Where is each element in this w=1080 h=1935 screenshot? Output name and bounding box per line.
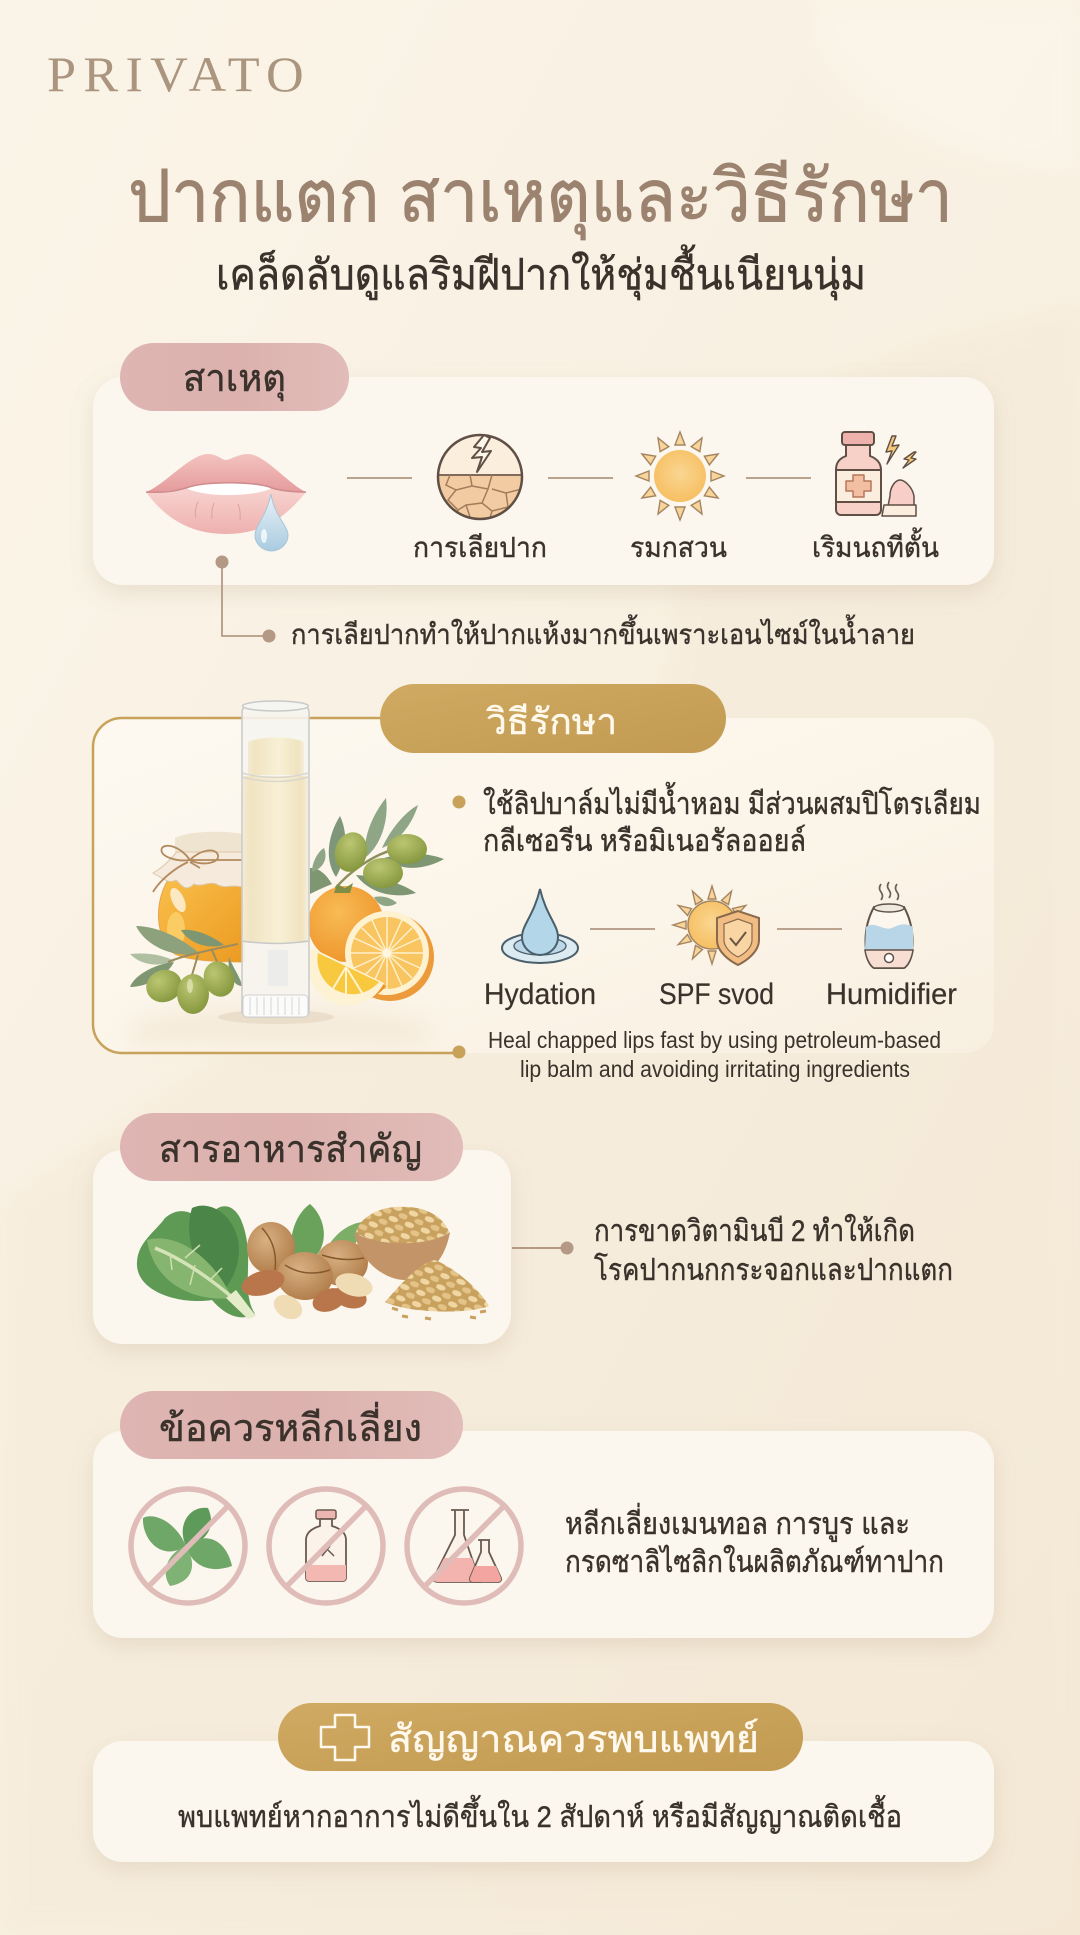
panel: treatment — [93, 684, 994, 1082]
heading pill: treatment — [380, 684, 726, 753]
text: English note: lip balm and avoiding irritating ingredients — [520, 1056, 910, 1082]
connector lines — [590, 928, 842, 930]
callout: vitamin B2 note: โรคปากนกกระจอกและปากแตก — [594, 1252, 953, 1287]
label: SPF: SPF svod — [659, 978, 774, 1011]
callout: lip licking note: การเลียปากทำให้ปากแห้งมากขึ้นเพราะเอนไซม์ในน้ำลาย — [291, 614, 915, 650]
icon: chapped lips with drop — [146, 454, 306, 551]
heading pill: avoid — [120, 1391, 463, 1459]
heading pill: causes: สาเหตุ — [183, 358, 286, 401]
illustration: honey jar — [153, 832, 244, 962]
text: ingredients to avoid: หลีกเลี่ยงเมนทอล การบูร และ — [565, 1503, 910, 1542]
subtitle: เคล็ดลับดูแลริมฝีปากให้ชุ่มชื้นเนียนนุ่ม — [216, 244, 866, 301]
heading pill: avoid: ข้อควรหลีกเลี่ยง — [159, 1402, 422, 1450]
text: English note — [488, 1027, 941, 1082]
bullet — [452, 796, 466, 808]
heading pill: treatment: วิธีรักษา — [486, 701, 617, 742]
label: pregnancy: เริมนถทีตั้น — [812, 527, 939, 563]
icon: humidifier — [865, 882, 913, 968]
icon: no salicylic acid flask — [407, 1489, 521, 1603]
illustration: oranges and olives right — [308, 798, 444, 1006]
heading pill: nutrients: สารอาหารสำคัญ — [159, 1129, 422, 1171]
illustration: spinach nuts and grains — [137, 1204, 489, 1324]
heading pill: warning signs: สัญญาณควรพบแพทย์ — [388, 1718, 759, 1761]
callout: lip licking note — [216, 556, 915, 650]
illustration: olive branch left — [130, 926, 242, 1014]
callout: vitamin B2 note — [512, 1214, 953, 1287]
label: lip licking: การเลียปาก — [413, 532, 547, 563]
text: when to see a doctor: พบแพทย์หากอาการไม่ดีขึ้นใน 2 สัปดาห์ หรือมีสัญญาณติดเชื้อ — [178, 1795, 902, 1834]
icon: cracked skin — [436, 434, 524, 525]
text: lip balm advice: ใช้ลิปบาล์มไม่มีน้ำหอม มีส่วนผสมปิโตรเลียม — [483, 782, 981, 821]
label: hydration: Hydation — [484, 978, 596, 1011]
icon: medical cross — [321, 1715, 369, 1760]
label: environment: รมกสวน — [630, 532, 727, 563]
connector line — [347, 477, 811, 479]
panel: avoid — [93, 1391, 994, 1638]
heading pill: nutrients — [120, 1113, 463, 1181]
icon: no menthol — [131, 1489, 245, 1603]
dot — [452, 1046, 466, 1058]
text: ingredients to avoid — [565, 1503, 944, 1579]
callout: vitamin B2 note: การขาดวิตามินบี 2 ทำให้เกิด — [594, 1214, 915, 1248]
text: lip balm advice: กลีเซอรีน หรือมิเนอรัลออยล์ — [483, 824, 806, 858]
heading pill: warning signs — [278, 1703, 803, 1771]
title — [128, 157, 953, 301]
panel: see a doctor — [93, 1703, 994, 1862]
icon: no camphor bottle — [269, 1489, 383, 1603]
text: English note: Heal chapped lips fast by using petroleum-based — [488, 1027, 941, 1053]
illustration: lip balm tube — [218, 701, 334, 1024]
title: ปากแตก สาเหตุและวิธีรักษา — [128, 157, 953, 240]
logo: PRIVATO — [47, 46, 311, 102]
text: ingredients to avoid: กรดซาลิไซลิกในผลิตภัณฑ์ทาปาก — [565, 1544, 944, 1579]
label: humidifier: Humidifier — [826, 978, 957, 1011]
heading pill: causes — [120, 343, 349, 411]
icon: sun with shield — [673, 886, 759, 965]
icon: hydration drop — [502, 889, 578, 963]
panel: nutrients — [93, 1113, 511, 1344]
icon: sun — [636, 432, 724, 520]
panel: causes — [93, 343, 994, 585]
text: lip balm advice — [483, 782, 981, 858]
icon: medicine bottle and tube — [836, 432, 916, 516]
